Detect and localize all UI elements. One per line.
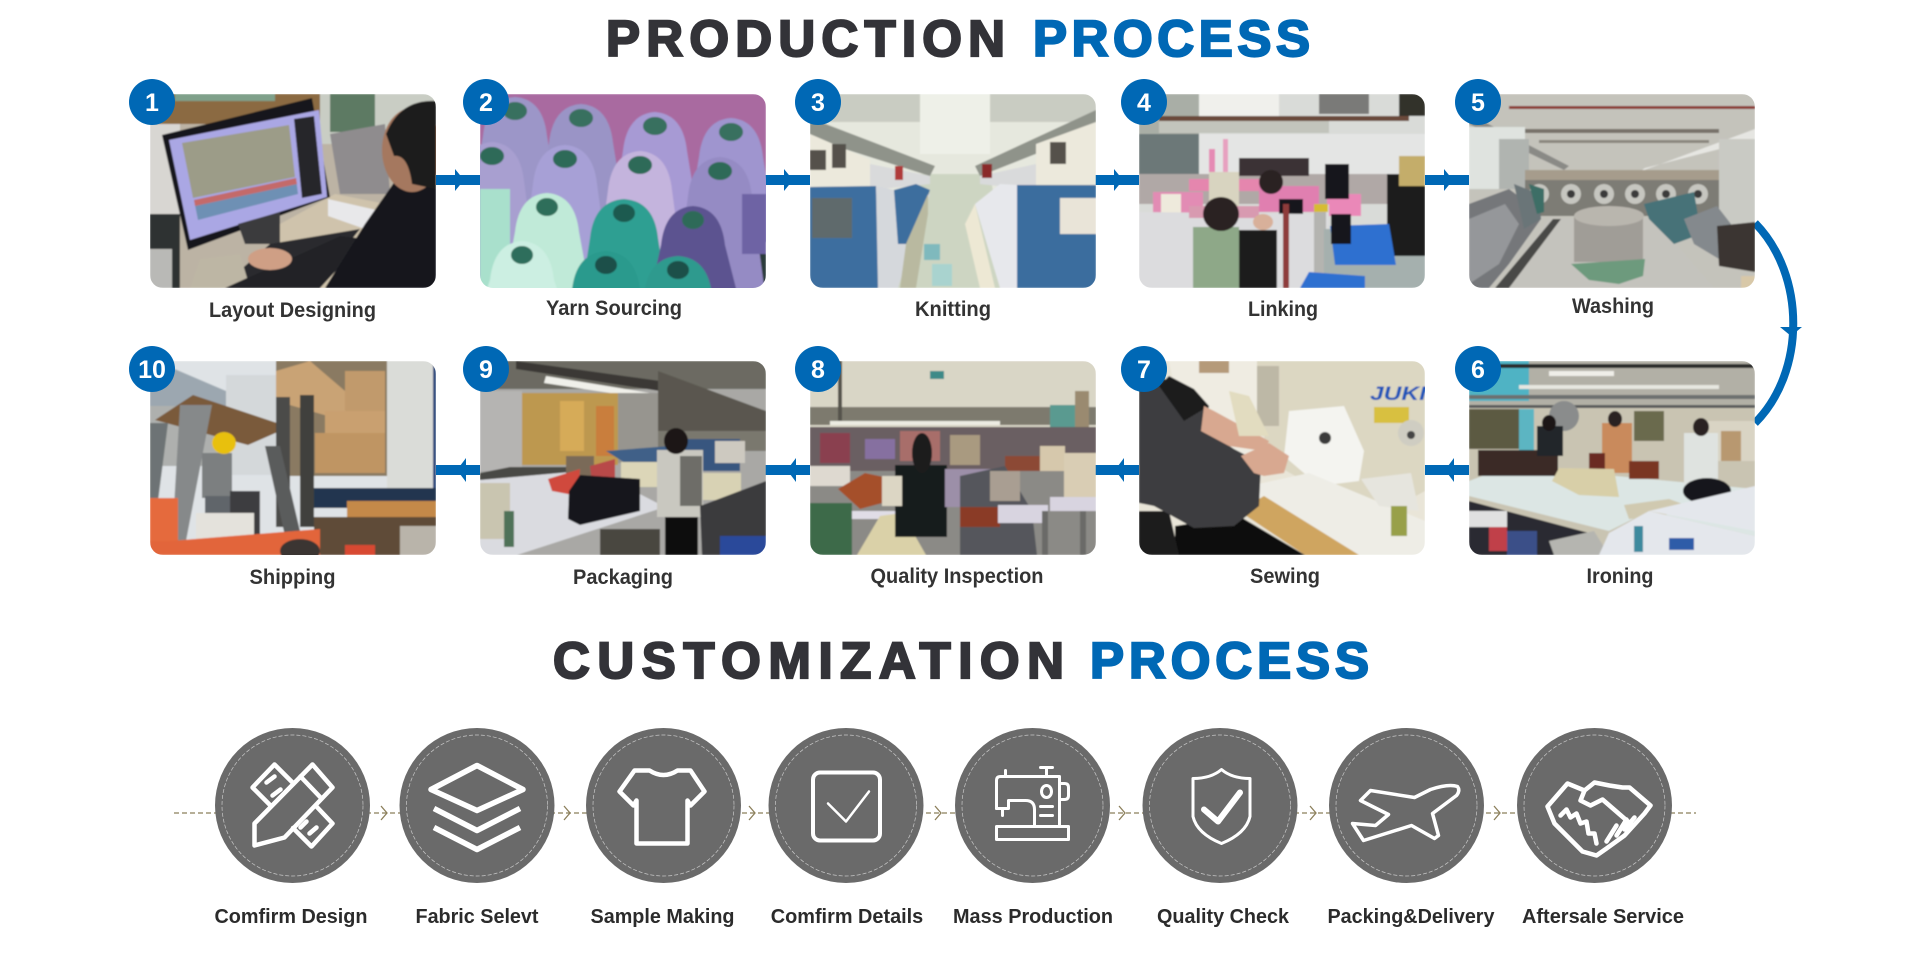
step: sample making xyxy=(586,728,741,883)
arrow: step 9 to 10 xyxy=(436,458,480,482)
step: aftersale service xyxy=(1517,728,1672,883)
icon: sewing machine xyxy=(996,768,1068,840)
badge 9: 9 xyxy=(479,356,493,384)
photo: quality inspection xyxy=(810,361,1096,555)
photo: packaging xyxy=(480,361,766,555)
step: comfirm details xyxy=(768,728,924,883)
photo: ironing xyxy=(1469,361,1755,555)
title: production process: PRODUCTION xyxy=(606,10,1005,67)
label: aftersale service: Aftersale Service xyxy=(1522,906,1684,928)
step: mass production xyxy=(955,728,1110,883)
label: knitting: Knitting xyxy=(915,298,991,321)
arrow: step 3 to 4 xyxy=(1095,169,1139,191)
label: quality inspection: Quality Inspection xyxy=(870,565,1044,588)
icon: pencil and ruler xyxy=(252,764,332,846)
label: ironing: Ironing xyxy=(1586,565,1654,588)
arrow: step 6 to 7 xyxy=(1425,458,1469,482)
badge 7 xyxy=(1121,346,1167,392)
badge 10: 10 xyxy=(138,356,166,384)
arrow: step 4 to 5 xyxy=(1425,169,1469,191)
badge 6 xyxy=(1455,346,1501,392)
arrow: step 7 to 8 xyxy=(1095,458,1139,482)
label: packaging: Packaging xyxy=(573,566,673,589)
photo: layout designing xyxy=(150,94,442,288)
arrow: curved step 5 to 6 xyxy=(1755,223,1802,423)
title: customization process: PROCESS xyxy=(1090,632,1369,689)
photo: shipping xyxy=(150,361,436,563)
badge 1: 1 xyxy=(145,89,159,117)
label: comfirm design: Comfirm Design xyxy=(214,906,368,928)
icon: handshake xyxy=(1548,782,1650,856)
badge 4: 4 xyxy=(1137,89,1151,117)
label: shipping: Shipping xyxy=(250,566,336,589)
arrow: step 1 to 2 xyxy=(436,169,480,191)
photo: washing xyxy=(1469,94,1755,288)
badge 5 xyxy=(1455,79,1501,125)
photo: linking xyxy=(1139,94,1425,288)
icon: airplane xyxy=(1352,786,1459,840)
badge 7: 7 xyxy=(1137,356,1151,384)
label: quality check: Quality Check xyxy=(1157,906,1290,928)
label: sample making: Sample Making xyxy=(590,906,734,928)
badge 1 xyxy=(129,79,175,125)
title: production process xyxy=(606,10,1310,67)
badge 10 xyxy=(129,346,175,392)
badge 4 xyxy=(1121,79,1167,125)
dashed connector with chevrons xyxy=(174,806,1696,820)
badge 8 xyxy=(795,346,841,392)
arrow: step 8 to 9 xyxy=(765,458,810,482)
photo: yarn sourcing xyxy=(480,94,766,288)
badge 2 xyxy=(463,79,509,125)
step: fabric selevt xyxy=(400,728,554,883)
photo: knitting xyxy=(810,94,1096,288)
badge 3 xyxy=(795,79,841,125)
arrow: step 2 to 3 xyxy=(765,169,810,191)
step: comfirm design xyxy=(215,728,370,883)
label: comfirm details: Comfirm Details xyxy=(771,906,923,928)
step: packing and delivery xyxy=(1329,728,1484,883)
photo: sewing: JUKI xyxy=(1370,384,1427,405)
label: layout designing: Layout Designing xyxy=(209,299,376,322)
label: mass production: Mass Production xyxy=(953,906,1113,928)
badge 2: 2 xyxy=(479,89,493,117)
icon: checkbox xyxy=(813,772,880,840)
title: customization process: CUSTOMIZATION xyxy=(553,632,1064,689)
photo: sewing xyxy=(1139,361,1427,555)
label: linking: Linking xyxy=(1248,298,1318,321)
badge 8: 8 xyxy=(811,356,825,384)
label: packing and delivery: Packing&Delivery xyxy=(1328,906,1495,928)
badge 6: 6 xyxy=(1471,356,1485,384)
badge 9 xyxy=(463,346,509,392)
icon: shield check xyxy=(1193,770,1250,844)
label: washing: Washing xyxy=(1572,295,1654,318)
icon: layers xyxy=(431,766,523,850)
icon: t-shirt xyxy=(620,770,704,844)
title: production process: PROCESS xyxy=(1033,10,1310,67)
title: customization process xyxy=(553,632,1369,689)
label: fabric selevt: Fabric Selevt xyxy=(416,906,539,928)
badge 5: 5 xyxy=(1471,89,1485,117)
step: quality check xyxy=(1142,728,1298,883)
badge 3: 3 xyxy=(811,89,825,117)
label: sewing: Sewing xyxy=(1250,565,1320,588)
label: yarn sourcing: Yarn Sourcing xyxy=(546,297,682,320)
